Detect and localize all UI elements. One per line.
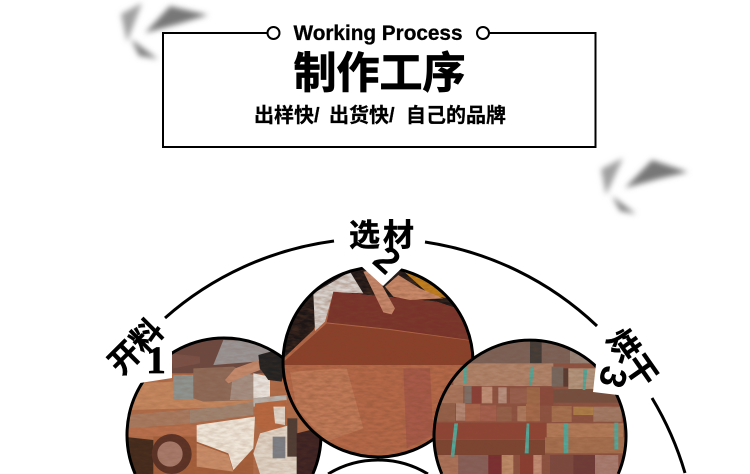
heading: 制作工序: 制作工序 [294,50,466,98]
subheading: 自己的品牌 [406,104,506,127]
subheading: 出货快/ [329,103,395,127]
step label 2: 选材 [349,218,417,286]
large process arc [165,241,685,473]
subheading: 出样快/ [254,104,320,127]
icon: left ring on frame [268,27,280,39]
heading: Working Process: Working Process [294,22,462,45]
step label 1: 开料: 开料 [102,313,170,381]
step label 3: 烘干: 烘干 [600,323,664,393]
icon: brush feather mark right [601,158,688,214]
photo circle 2: selected timber [280,265,477,462]
step label 1: 开料: 1 [146,339,166,382]
step label 2: 选材: 选材 [349,218,417,253]
title frame [163,33,596,147]
icon: brush feather mark top left [121,3,208,59]
icon: right ring on frame [477,27,489,39]
photo circle 3: stacked drying timber [430,337,630,474]
photo circle 1: cutting timber [123,333,323,474]
step label 2: 选材: 2 [366,238,408,282]
circle photo 5 partly visible at the bottom [328,460,428,474]
step label 3: 烘干: 3 [591,362,635,392]
